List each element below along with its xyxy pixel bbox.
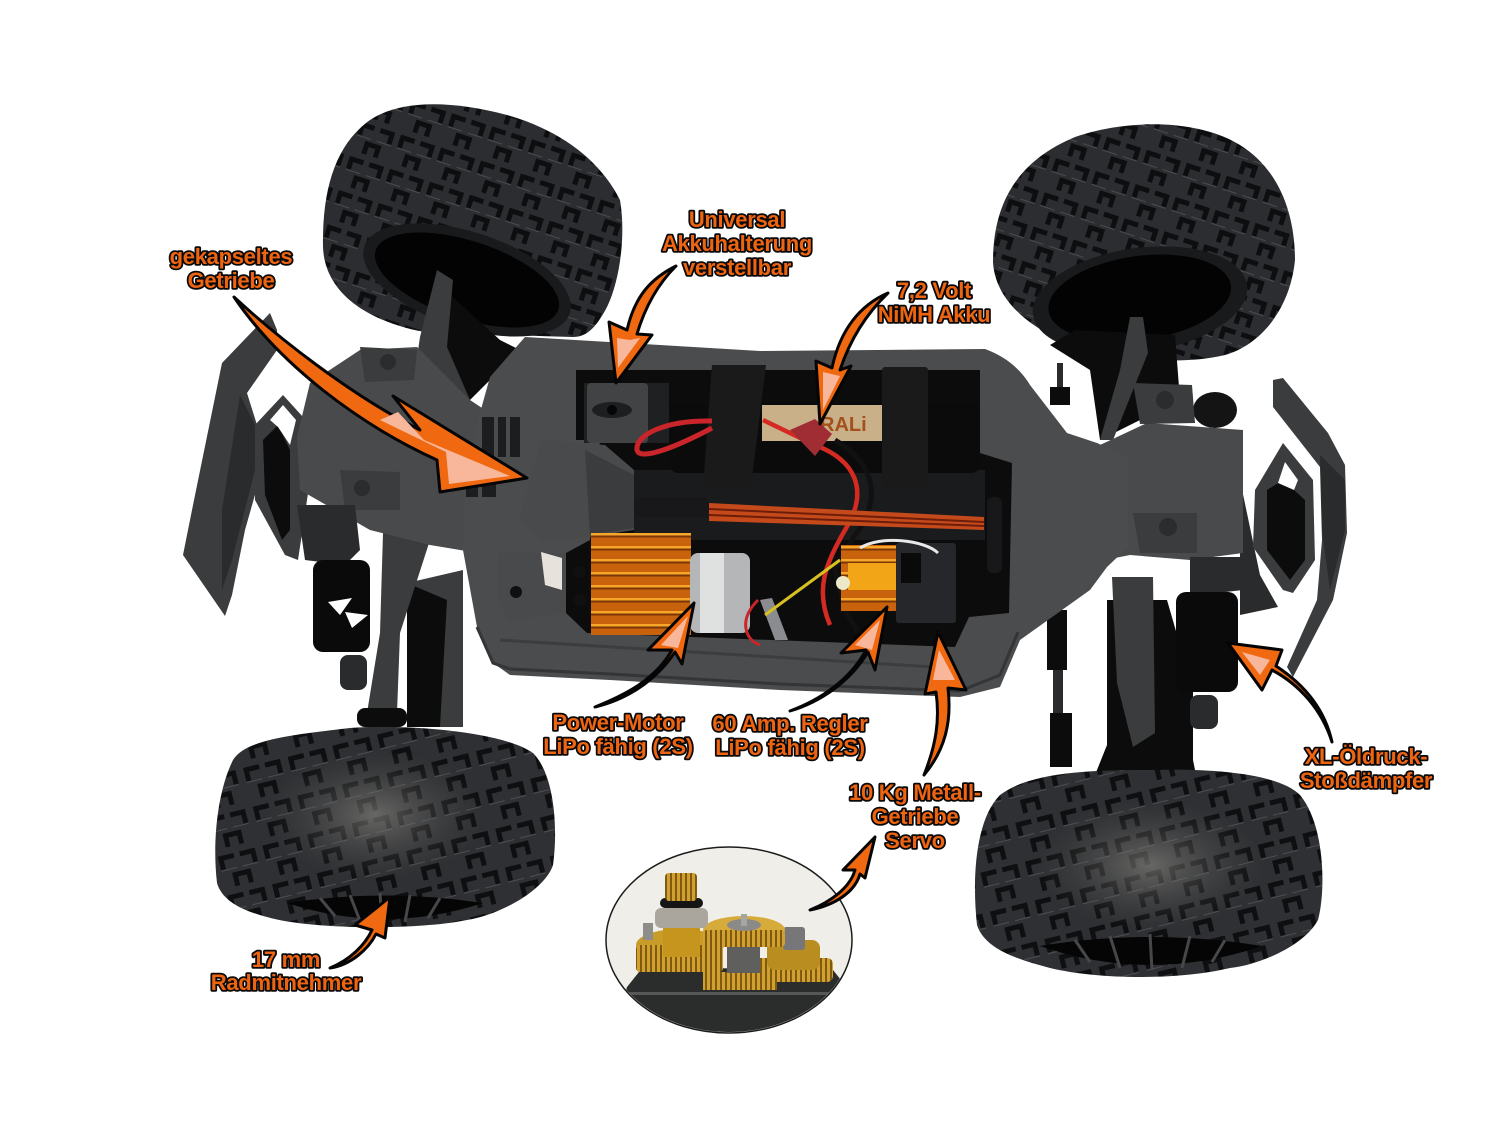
arrow: Metallgetriebe inset	[810, 837, 875, 910]
drive shaft	[634, 497, 1002, 573]
motor heat sink	[591, 533, 691, 635]
servo case	[626, 968, 840, 1032]
tire: rear left	[215, 727, 555, 927]
bearing and shaft gear	[655, 908, 708, 928]
screws and logo	[510, 586, 522, 598]
servo gear inset photo	[606, 847, 852, 1040]
silver shaft	[727, 947, 760, 973]
front right arm	[1050, 317, 1180, 440]
rear right rim	[1040, 937, 1262, 965]
arrow: Akkuhalterung	[609, 266, 676, 383]
arrow: Servo	[924, 632, 966, 775]
velcro straps	[703, 365, 766, 487]
left loop and rear block	[255, 395, 310, 560]
label: 17 mm Radmitnehmer: Radmitnehmer	[211, 970, 362, 995]
chassis tub: RALi	[820, 414, 867, 436]
power motor	[690, 553, 840, 645]
left shock absorber	[297, 505, 370, 690]
tire: front right	[993, 124, 1295, 367]
battery pack	[670, 403, 980, 473]
right stacked gear	[752, 958, 833, 982]
arrow: NiMH Akku	[816, 293, 888, 424]
battery holder	[584, 383, 669, 443]
label: 10 Kg Metall-Getriebe Servo: 10 Kg Metall-	[849, 780, 981, 805]
transmission housing	[520, 440, 634, 540]
arrow: Radmitnehmer	[330, 897, 390, 968]
label: Power-Motor: LiPo fähig (2S)	[543, 734, 693, 759]
label: XL-Öldruck-Stoßdämpfer: XL-Öldruck-	[1305, 744, 1427, 769]
label: gekapseltes Getriebe: Getriebe	[188, 268, 274, 293]
vent slots	[466, 417, 520, 497]
label: Power-Motor: Power-Motor	[552, 710, 684, 735]
arrow: Stoßdämpfer	[1228, 643, 1332, 742]
rear left arm and frame	[357, 533, 463, 727]
right shock absorber	[1176, 557, 1243, 729]
battery wires and connector	[637, 421, 712, 454]
arrow: Regler	[790, 607, 887, 711]
label: 10 Kg Metall-Getriebe Servo: Getriebe	[872, 804, 958, 829]
front left arm	[410, 270, 520, 405]
label: 17 mm Radmitnehmer: 17 mm	[252, 947, 320, 972]
bottom gear	[703, 972, 777, 990]
right loop and rear block	[1240, 443, 1315, 615]
label: 10 Kg Metall-Getriebe Servo: Servo	[885, 828, 945, 853]
left bumper	[183, 313, 277, 616]
arrow: Power-Motor	[595, 603, 694, 707]
rear right gearbox	[1100, 383, 1243, 560]
label: 60 Amp. Regler: LiPo fähig (2S)	[715, 735, 865, 760]
chassis tub	[463, 337, 1128, 697]
rear right arm and frame	[1047, 577, 1197, 780]
tire: rear right	[975, 770, 1322, 977]
battery and electronics bay	[566, 370, 1012, 647]
label: 60 Amp. Regler: 60 Amp. Regler	[712, 711, 868, 736]
annotated RC truck infographic	[168, 104, 1434, 1034]
label: Universal Akkuhalterung: Universal	[689, 207, 785, 232]
label: 7,2 Volt NiMH Akku: 7,2 Volt	[897, 278, 971, 303]
rear left rim	[287, 896, 483, 919]
large gear	[636, 930, 724, 948]
label: XL-Öldruck-Stoßdämpfer: Stoßdämpfer	[1300, 768, 1433, 793]
middle gear	[703, 916, 785, 932]
speed controller	[836, 540, 956, 623]
label: Universal Akkuhalterung: verstellbar	[683, 255, 792, 280]
arrow: gekapseltes Getriebe	[234, 297, 527, 492]
label: gekapseltes Getriebe: gekapseltes	[170, 244, 292, 269]
label: 7,2 Volt NiMH Akku: NiMH Akku	[878, 302, 990, 327]
label: Universal Akkuhalterung: Akkuhalterung	[662, 231, 812, 256]
right bumper	[1273, 378, 1347, 677]
lower left electronics plate	[498, 553, 566, 620]
rear left gearbox	[297, 347, 530, 560]
tire: front left	[323, 104, 622, 359]
labels	[170, 207, 1433, 995]
